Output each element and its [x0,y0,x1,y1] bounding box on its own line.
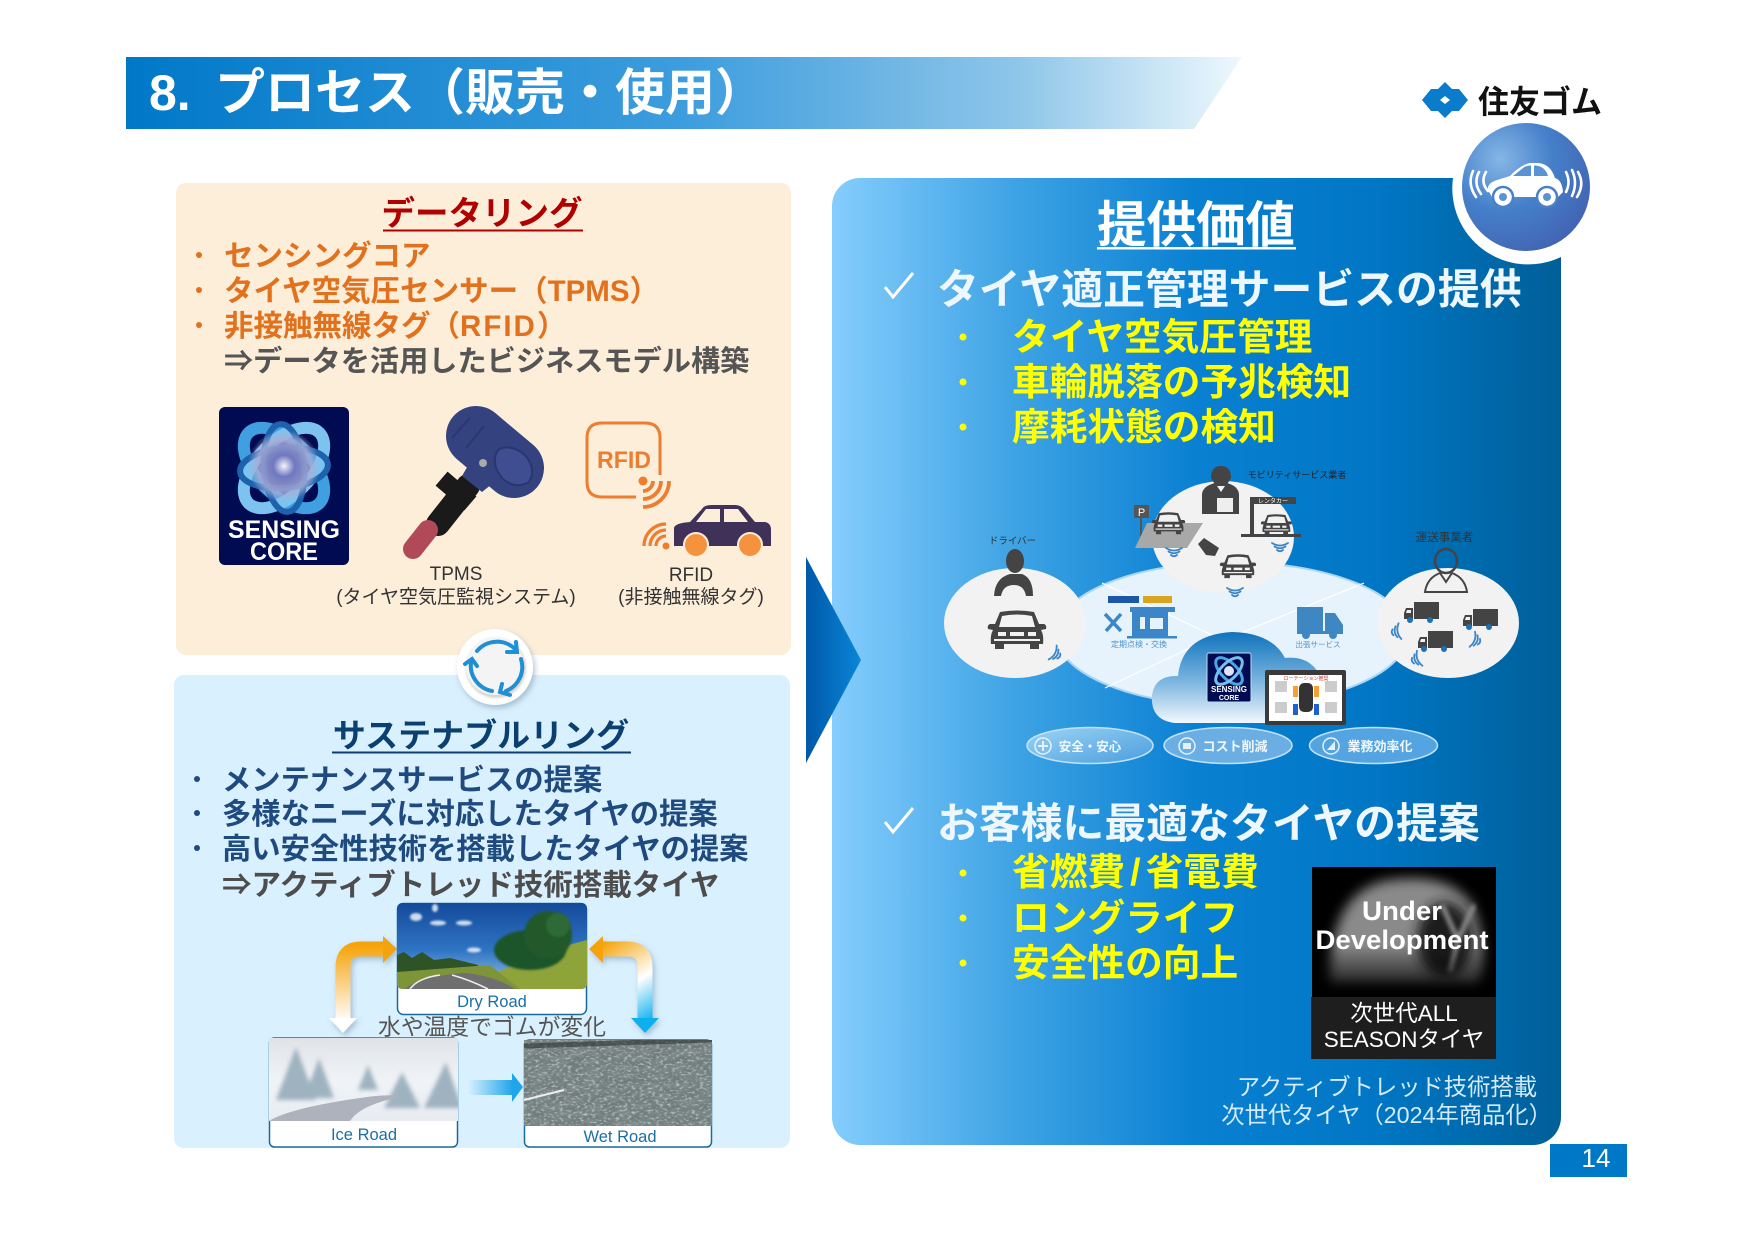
icon: RFID tag and car [587,423,771,557]
icon: connected car badge [1462,123,1590,251]
pill: cost reduction: コスト削減 [1202,739,1268,754]
panel: provided value [832,178,1561,1145]
caption: active tread [1221,1074,1552,1128]
page number: 14 [1582,1143,1610,1173]
icon: sync circle [457,629,533,705]
yellow list: tire management: 車輪脱落の予兆検知 [1012,361,1351,403]
photo: next-generation tire: SEASONタイヤ [1324,1027,1484,1052]
sustainable ring bullet list [194,764,748,902]
photo: ice road [269,1038,462,1147]
photo: next-generation tire [1311,867,1496,1059]
photo: wet road: Wet Road [583,1128,657,1146]
circle: mobility service: モビリティサービス業者 [1248,469,1346,480]
service: on-site service: 出張サービス [1296,639,1340,649]
panel: data-ring [176,183,791,655]
icon: sensing core logo [219,407,349,566]
logo: Sumitomo Rubber [1422,82,1602,120]
tablet [1265,670,1346,725]
data-ring bullet list [196,240,749,378]
pill: operational efficiency [1310,728,1438,764]
heading: sustainable ring: サステナブルリング [333,717,629,754]
yellow list: tire proposals [960,851,1259,984]
yellow list: tire proposals: ロングライフ [1012,897,1238,939]
photo: ice road: Ice Road [331,1126,397,1144]
diagram: mobility ecosystem [944,466,1519,764]
photo: next-generation tire: Development [1316,925,1489,955]
label: RFID: (非接触無線タグ) [618,586,764,608]
photo: next-generation tire: Under [1362,896,1442,926]
circle: mobility service: レンタカー [1258,497,1288,505]
caption: active tread: アクティブトレッド技術搭載 [1237,1074,1537,1100]
heading: provided value: 提供価値 [1097,198,1295,253]
label: TPMS: TPMS [430,564,482,585]
yellow list: tire proposals: 安全性の向上 [1012,942,1238,984]
data-ring bullet list: 非接触無線タグ（RFID） [224,310,566,343]
circle: transport operators: 運送事業者 [1416,530,1473,544]
caption: rubber changes: 水や温度でゴムが変化 [378,1014,606,1040]
circle: driver: ドライバー [989,536,1036,547]
photo: dry road [397,903,587,1014]
section: tire management service [885,266,1522,448]
pill: operational efficiency: 業務効率化 [1347,739,1413,754]
sustainable ring bullet list: メンテナンスサービスの提案 [222,764,602,797]
caption: active tread: 次世代タイヤ（2024年商品化） [1221,1102,1552,1128]
data-ring bullet list: センシングコア [224,240,431,273]
page number [1550,1143,1627,1177]
tablet: ローテーション推奨 [1284,675,1328,682]
section: optimal tire proposals [885,800,1480,984]
service: periodic inspection: 定期点検・交換 [1111,639,1167,649]
heading: data-ring: データリング [382,195,582,233]
label: TPMS: (タイヤ空気圧監視システム) [336,586,576,608]
title: プロセス（販売・使用） [215,65,765,121]
yellow list: tire management [960,316,1351,448]
pill: safety: 安全・安心 [1059,739,1122,754]
arrow: ice to wet [468,1073,523,1102]
circle: driver [944,536,1086,678]
section: tire management service: タイヤ適正管理サービスの提供 [937,266,1522,313]
data-ring bullet list: タイヤ空気圧センサー（TPMS） [224,275,659,308]
section: optimal tire proposals: お客様に最適なタイヤの提案 [937,800,1480,847]
title bar [126,57,1242,129]
circle: mobility service: P [1138,507,1145,519]
logo: Sumitomo Rubber: 住友ゴム [1478,84,1602,120]
yellow list: tire proposals: 省燃費/省電費 [1012,851,1259,893]
sensing core mini logo: SENSING [1211,685,1247,694]
circle: transport operators [1377,530,1519,678]
icon: TPMS sensor [413,418,532,549]
sustainable ring bullet list: 多様なニーズに対応したタイヤの提案 [222,797,718,831]
pill: cost reduction [1164,728,1292,764]
circle: mobility service [1134,466,1346,596]
service: on-site service [1296,607,1343,649]
arrow: dry to wet [589,936,659,1033]
photo: next-generation tire: 次世代ALL [1350,1001,1458,1026]
photo: dry road: Dry Road [457,993,527,1011]
panel: sustainable ring [174,675,790,1148]
label: RFID [618,565,764,608]
icon: sensing core logo: SENSING [228,516,340,544]
data-ring bullet list: ⇒データを活用したビジネスモデル構築 [224,344,749,378]
title: 8. [149,65,191,121]
label: TPMS [336,564,576,608]
icon: sensing core logo: CORE [250,538,318,566]
sustainable ring bullet list: 高い安全性技術を搭載したタイヤの提案 [222,833,748,866]
sensing core mini logo: CORE [1219,695,1239,702]
arrow: panel connector [806,557,861,763]
sustainable ring bullet list: ⇒アクティブトレッド技術搭載タイヤ [222,868,719,902]
sensing core mini logo [1207,653,1251,702]
arrow: dry to ice [329,936,397,1033]
photo: wet road [524,1040,712,1147]
big ellipse [1056,562,1408,706]
yellow list: tire management: タイヤ空気圧管理 [1012,316,1312,358]
icon: RFID tag and car: RFID [597,447,651,474]
pill: safety [1027,728,1153,764]
label: RFID: RFID [669,565,713,586]
cloud [1152,632,1346,725]
service: periodic inspection [1105,596,1177,649]
yellow list: tire management: 摩耗状態の検知 [1012,406,1276,448]
